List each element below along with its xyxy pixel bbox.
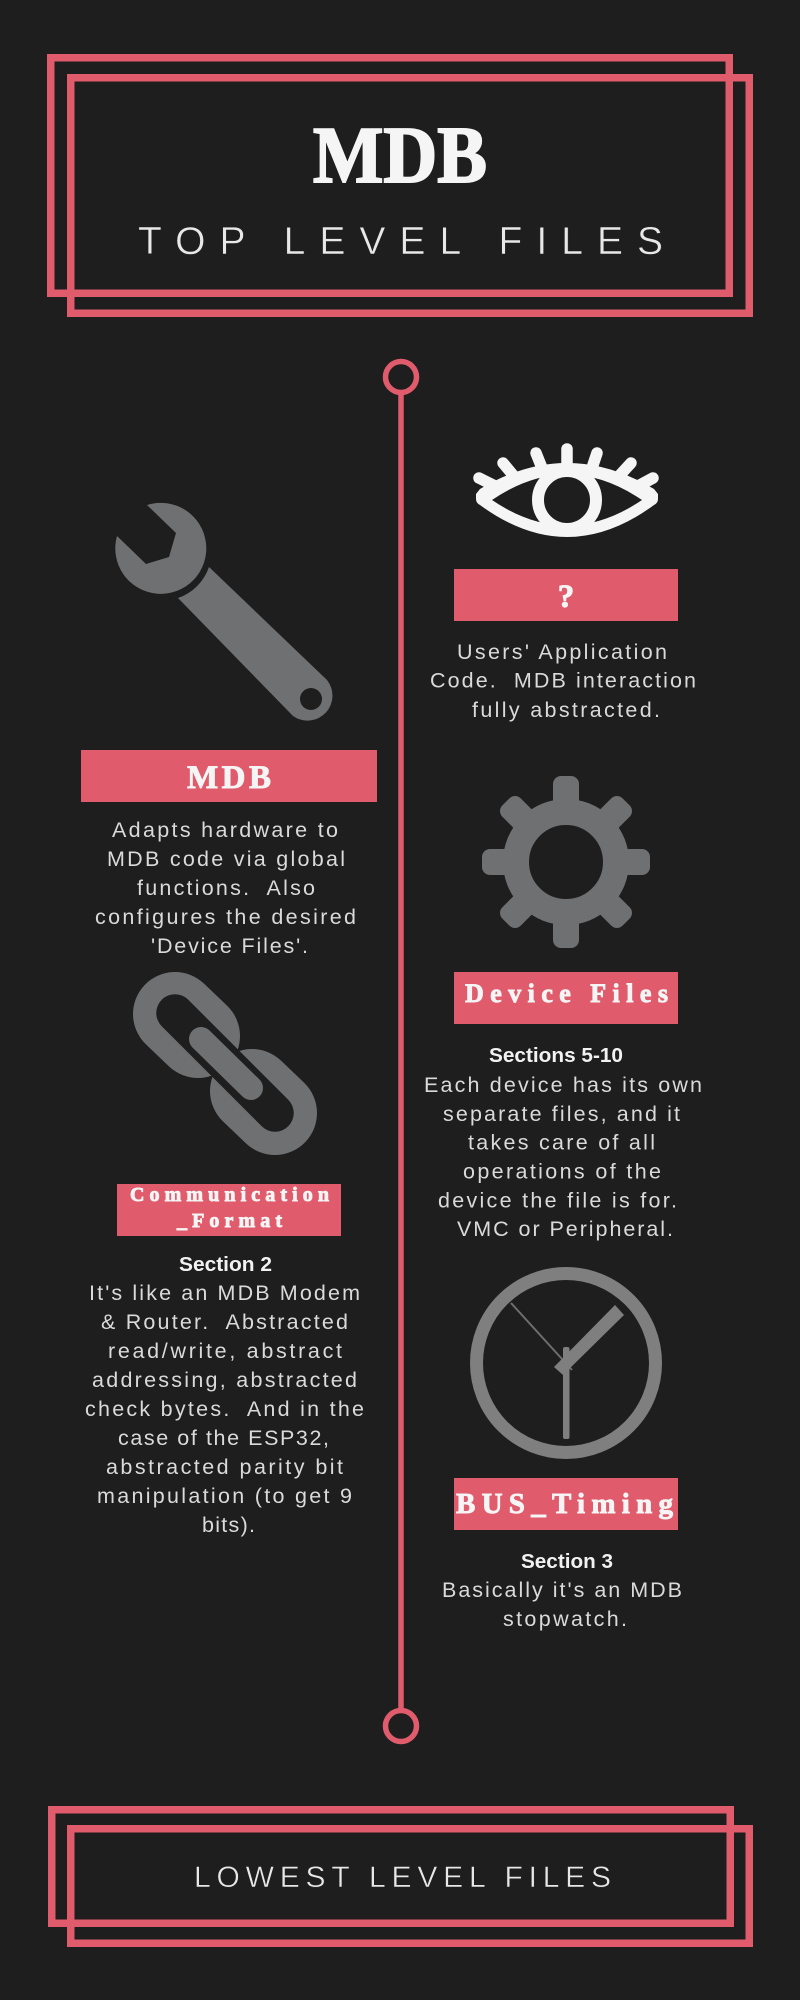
text: user application description [430,640,696,722]
text: device files description: operations of the [463,1160,661,1184]
text: device files description: Sections 5-10 [489,1045,623,1067]
banner: communication format: _Format [176,1210,282,1232]
banner: communication format [117,1184,341,1236]
banner: bus timing: BUS_Timing [456,1488,674,1520]
banner: bus timing [454,1478,678,1530]
text: user application description: fully abstracted. [472,698,660,722]
text: device files description: Each device has its own [424,1073,702,1097]
banner: communication format: Communication [130,1184,329,1206]
panel: bus timing [442,1274,682,1631]
text: device files description: separate files, and it [443,1102,680,1126]
banner: question mark [454,569,678,621]
text: user application description: Code. MDB interaction [430,668,696,692]
footer frames [52,1810,749,1943]
text: bus timing description: Basically it's an MDB [442,1578,682,1602]
title: MDB: MDB [313,110,487,200]
panel: MDB [81,503,377,958]
text: MDB description: MDB code via global [107,847,345,871]
banner: device files [454,972,678,1024]
footer panel [52,1810,749,1943]
text: MDB description: configures the desired [95,905,356,929]
text: communication format description: & Router. Abstracted [101,1310,348,1334]
text: communication format description: abstracted parity bit [106,1455,343,1479]
footer text: lowest level files: LOWEST LEVEL FILES [194,1861,611,1894]
text: MDB description: Adapts hardware to [112,818,338,842]
text: communication format description [85,1254,364,1537]
panel: user application [430,449,696,722]
title frames [51,58,749,313]
text: communication format description: check bytes. And in the [85,1397,364,1421]
text: communication format description: read/write, abstract [108,1339,342,1363]
icon: chain link [175,1013,275,1113]
text: communication format description: Section 2 [179,1254,272,1276]
text: bus timing description: stopwatch. [503,1607,627,1631]
banner: MDB [81,750,377,802]
banner: device files: Device Files [465,979,668,1008]
text: device files description [424,1045,702,1241]
text: communication format description: manipulation (to get 9 [97,1484,352,1508]
panel: device files [424,776,702,1241]
text: MDB description: 'Device Files'. [151,934,308,958]
text: communication format description: It's like an MDB Modem [89,1281,360,1305]
text: communication format description: bits). [202,1513,255,1537]
icon: gear [482,776,650,948]
icon: eye [476,449,658,537]
icon: wrench [115,503,332,721]
text: MDB description [95,818,356,958]
text: communication format description: addressing, abstracted [92,1368,357,1392]
panel: communication format [85,1013,364,1537]
timeline [386,362,416,1742]
text: device files description: takes care of all [468,1130,655,1154]
text: bus timing description [442,1551,682,1631]
text: device files description: device the file is for. [438,1188,677,1212]
icon: clock [476,1274,656,1452]
text: MDB description: functions. Also [137,876,315,900]
subtitle: top level files: TOP LEVEL FILES [138,220,663,263]
text: communication format description: case of the ESP32, [118,1426,329,1450]
text: bus timing description: Section 3 [521,1551,613,1573]
title panel [51,58,749,313]
banner: MDB: MDB [187,760,271,796]
text: user application description: Users' Application [457,640,667,664]
banner: question mark: ? [558,579,574,615]
text: device files description: VMC or Peripheral. [457,1217,673,1241]
